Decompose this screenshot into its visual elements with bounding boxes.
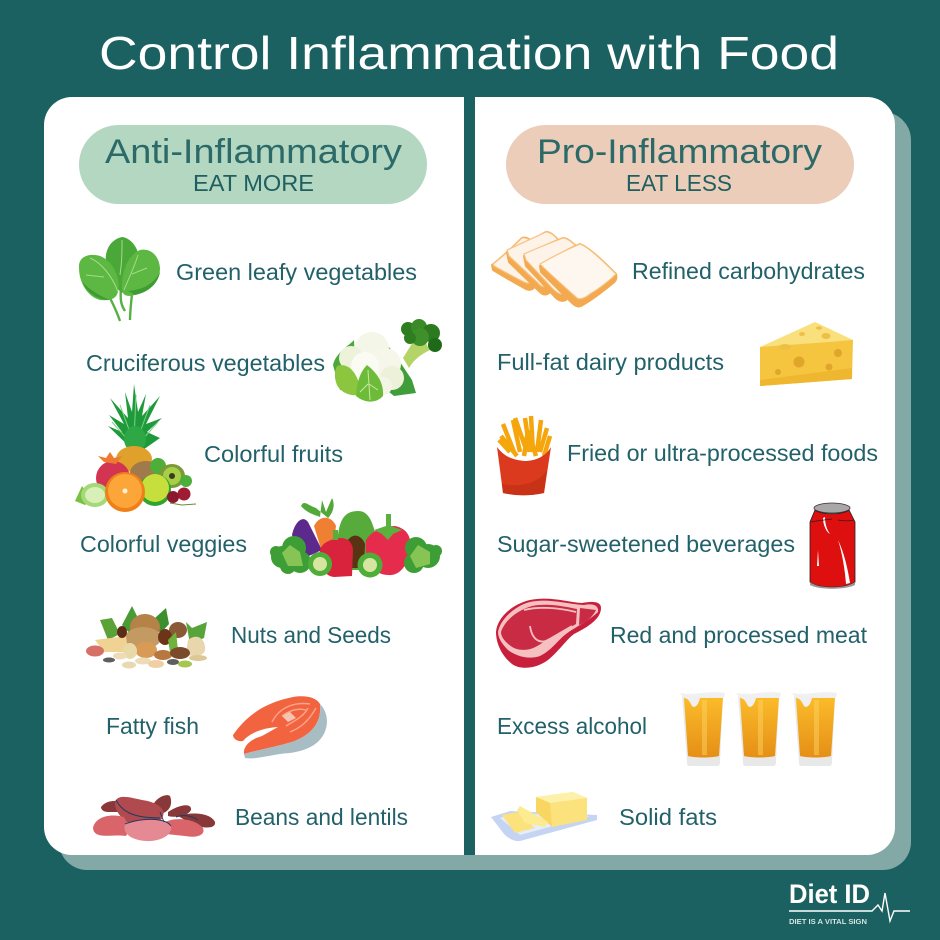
icon: butter on a dish: [491, 792, 597, 841]
heading pill: anti-inflammatory: [79, 125, 427, 204]
label: Colorful veggies: [80, 531, 247, 557]
label: Fried or ultra-processed foods: [567, 440, 878, 466]
icon: colorful fruits: [75, 384, 196, 512]
label: Refined carbohydrates: [632, 258, 865, 284]
heading pill: anti-inflammatory: EAT MORE: [193, 170, 314, 196]
label: Nuts and Seeds: [231, 622, 391, 648]
icon: cheese: [760, 322, 853, 386]
label: Cruciferous vegetables: [86, 350, 325, 376]
label: Full-fat dairy products: [497, 349, 724, 375]
label: Beans and lentils: [235, 804, 408, 830]
label: Green leafy vegetables: [176, 259, 417, 285]
logo: Diet ID: [789, 879, 910, 926]
icon: cauliflower and broccoli: [333, 319, 442, 402]
white card: [44, 97, 895, 855]
icon: beans and lentils: [93, 795, 215, 841]
heading pill: anti-inflammatory: Anti-Inflammatory: [105, 133, 402, 171]
icon: soda can: [810, 503, 855, 589]
panel: anti-inflammatory: [75, 125, 442, 841]
heading pill: pro-inflammatory: EAT LESS: [626, 170, 732, 196]
title: Control Inflammation with Food: [99, 27, 839, 79]
label: Solid fats: [619, 804, 717, 830]
label: Sugar-sweetened beverages: [497, 531, 795, 557]
logo: Diet ID: DIET IS A VITAL SIGN: [789, 917, 867, 926]
icon: red meat: [496, 599, 601, 668]
panel: pro-inflammatory: [491, 125, 878, 841]
column divider: [464, 97, 475, 855]
label: Fatty fish: [106, 713, 199, 739]
icon: salmon steak: [233, 696, 327, 758]
card shadow: [59, 112, 911, 870]
logo: Diet ID: Diet ID: [789, 879, 870, 909]
heading pill: pro-inflammatory: [506, 125, 854, 204]
label: Excess alcohol: [497, 713, 647, 739]
icon: spinach: [79, 237, 160, 321]
icon: three glasses of beer: [680, 692, 837, 766]
icon: nuts and seeds: [86, 606, 207, 668]
icon: french fries: [497, 416, 551, 495]
label: Colorful fruits: [204, 441, 343, 467]
icon: colorful veggies: [270, 498, 442, 578]
label: Red and processed meat: [610, 622, 868, 648]
icon: sliced bread: [492, 232, 616, 306]
heading pill: pro-inflammatory: Pro-Inflammatory: [537, 133, 822, 171]
